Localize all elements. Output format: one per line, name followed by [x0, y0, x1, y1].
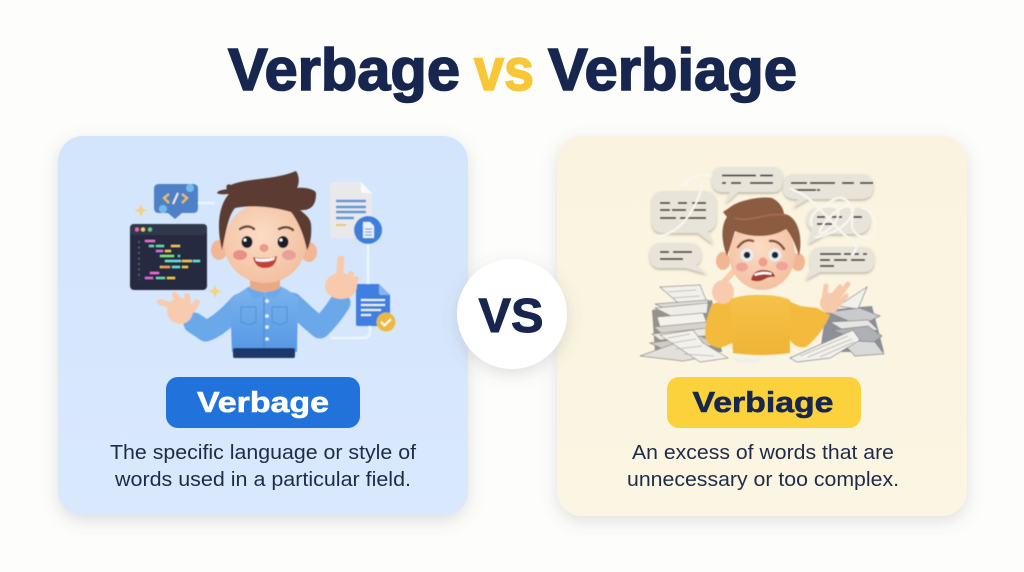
illustration: developer character with code and documents: [130, 171, 396, 358]
icon: sparkles: [134, 204, 222, 298]
belt: [233, 348, 295, 358]
torso: [230, 283, 298, 352]
icon: approved document: [356, 284, 396, 332]
verbiage description: unnecessary or too complex.: [627, 469, 899, 491]
collar, placket and pockets: [246, 282, 282, 299]
title: vs: [474, 37, 534, 103]
neck: [250, 275, 280, 292]
verbage description: words used in a particular field.: [114, 469, 411, 491]
tangled lines: [658, 175, 875, 256]
character: developer: [160, 171, 357, 358]
left hand: [712, 272, 734, 304]
character: overwhelmed person: [705, 197, 848, 355]
icon: document with badge: [330, 182, 382, 244]
right hand: [820, 284, 848, 313]
vs badge: [457, 259, 567, 369]
hair: [217, 171, 316, 250]
verbiage label: [667, 377, 861, 428]
ears: [211, 240, 227, 260]
left arm: [705, 298, 735, 348]
speech bubbles: [650, 167, 874, 280]
panel: verbage: [58, 136, 468, 516]
right arm: [784, 300, 830, 347]
verbage label: Verbage: [197, 387, 329, 419]
title: Verbiage: [548, 37, 797, 103]
hair: [722, 197, 800, 256]
verbiage description: An excess of words that are: [632, 442, 894, 464]
face: brows, eyes, cheeks, nose, mouth: [240, 226, 293, 230]
verbiage label: Verbiage: [692, 387, 834, 419]
title: Verbage: [228, 37, 460, 103]
bubble text lines: [660, 176, 873, 266]
connector lines: [198, 203, 370, 338]
paper sheet text lines: [668, 290, 854, 357]
verbage description: The specific language or style of: [110, 442, 416, 464]
head: [224, 203, 306, 283]
floor paper: [733, 358, 763, 363]
illustration: overwhelmed character with paper and tangled speech: [640, 167, 884, 363]
panel: verbiage: [557, 136, 967, 516]
verbiage description: [627, 442, 899, 491]
left arm: [194, 304, 240, 331]
title: [228, 37, 797, 103]
icon: code speech bubble: [154, 184, 198, 219]
icon: code editor window: [130, 224, 207, 290]
torso: [730, 295, 790, 355]
left hand: [160, 295, 197, 324]
paper stack: right: [790, 287, 884, 362]
right hand: [325, 259, 357, 299]
face: [738, 240, 784, 249]
paper stack: left: [640, 285, 728, 362]
head: [729, 218, 795, 290]
vs badge: VS: [478, 290, 544, 343]
verbage description: [110, 442, 416, 491]
verbage label: [166, 377, 360, 428]
right arm: [292, 303, 340, 328]
ears: [716, 252, 730, 270]
